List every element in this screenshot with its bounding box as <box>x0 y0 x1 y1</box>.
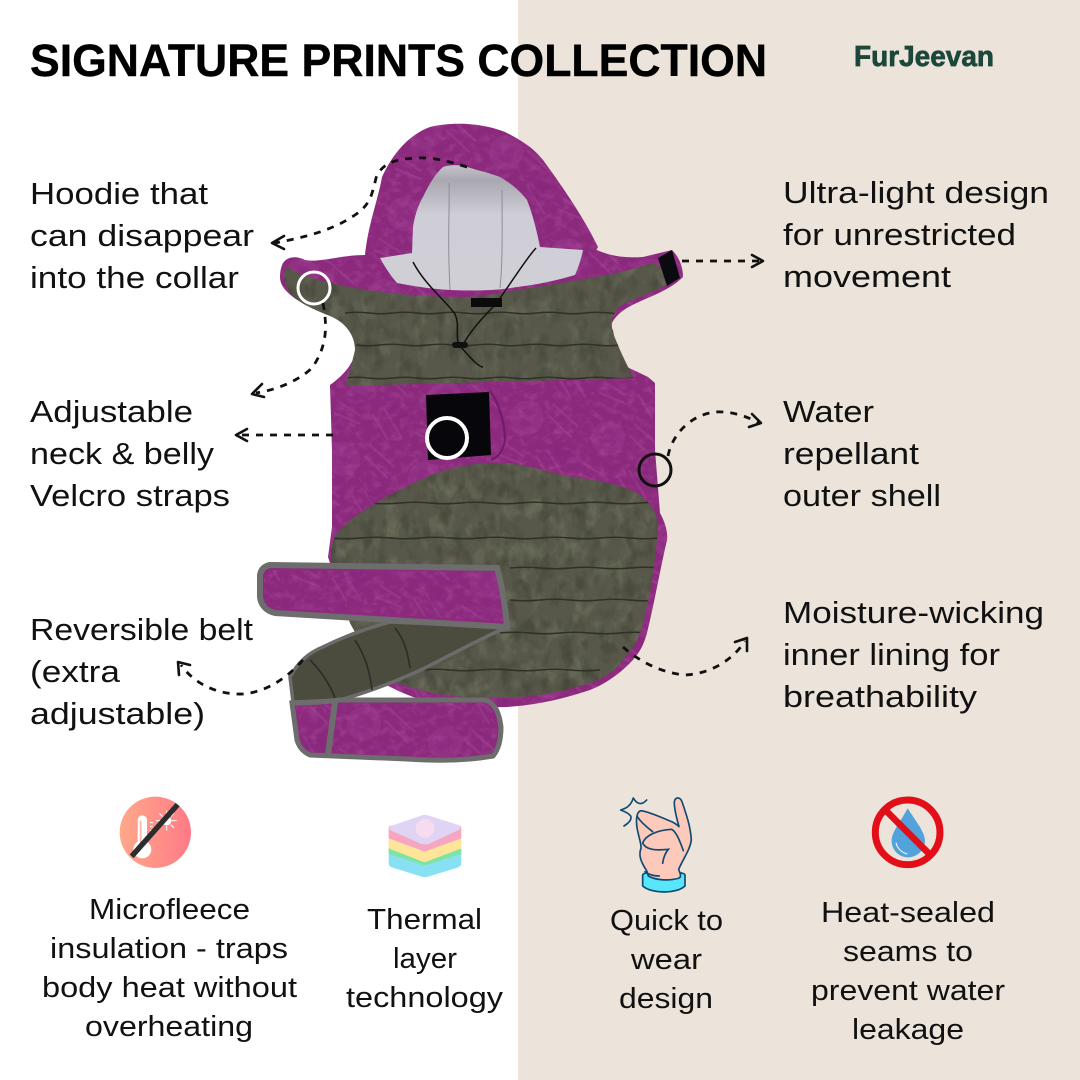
label: water repellant <box>783 394 941 513</box>
label: ultra-light: Ultra-light design <box>783 175 1049 210</box>
label: hoodie <box>30 176 254 295</box>
icon: no water drop <box>875 800 940 865</box>
panel: beige right background <box>518 0 1080 1080</box>
text: quick to wear design: design <box>619 983 713 1015</box>
velcro black patch <box>426 392 491 460</box>
label: hoodie: Hoodie that <box>30 176 208 211</box>
label: moisture-wicking <box>783 595 1044 714</box>
hood lining folds <box>449 183 502 290</box>
belt lower print <box>296 703 498 757</box>
label: ultra-light <box>783 175 1049 294</box>
arrow: water repellant <box>668 412 761 456</box>
text: microfleece insulation: body heat without <box>42 972 297 1004</box>
text: heat-sealed seams: Heat-sealed <box>821 897 995 929</box>
olive shadows lower <box>331 463 658 698</box>
arrow: ultra-light <box>682 255 763 267</box>
text: heat-sealed seams: prevent water <box>811 975 1005 1007</box>
label: water repellant: outer shell <box>783 478 941 513</box>
belt lower section <box>292 700 501 760</box>
inner olive lower panel <box>331 462 658 698</box>
text: quick to wear design: wear <box>630 944 702 976</box>
label: moisture-wicking: breathability <box>783 679 978 714</box>
logo: FurJeevan: FurJeevan <box>854 41 994 73</box>
callout ring: velcro <box>427 418 467 458</box>
icon: crossed thermometer <box>120 797 191 868</box>
hand creases <box>637 817 683 876</box>
label: hoodie: into the collar <box>30 260 239 295</box>
label: reversible belt <box>30 612 253 731</box>
belt underside folds <box>310 628 410 698</box>
inner olive neck panel <box>284 263 666 386</box>
belt loop <box>328 702 335 755</box>
text: microfleece insulation: insulation - traps <box>50 933 288 965</box>
olive highlights upper <box>304 268 666 386</box>
chest flap edge <box>490 391 505 460</box>
label: velcro straps: Adjustable <box>30 394 193 429</box>
olive shadows upper <box>284 264 662 385</box>
label: water repellant: Water <box>783 394 874 429</box>
belt underside olive <box>290 622 507 702</box>
belt upper section <box>260 565 507 627</box>
text: thermal layer technology: layer <box>393 943 457 975</box>
callout ring: outer shell <box>639 454 671 486</box>
label: ultra-light: for unrestricted <box>783 217 1016 252</box>
stitch lines upper <box>345 312 633 379</box>
text: microfleece insulation <box>42 894 297 1043</box>
olive highlights lower <box>336 463 654 698</box>
label: reversible belt: (extra <box>30 654 121 689</box>
text: microfleece insulation: Microfleece <box>89 894 250 926</box>
title: SIGNATURE PRINTS COLLECTION <box>30 35 767 86</box>
product photo: reversible dog jacket <box>260 124 690 760</box>
label: ultra-light: movement <box>783 259 951 294</box>
text: heat-sealed seams: leakage <box>852 1014 964 1046</box>
olive base upper <box>284 263 666 386</box>
label: hoodie: can disappear <box>30 218 254 253</box>
label: water repellant: repellant <box>783 436 919 471</box>
belt upper print <box>264 570 503 621</box>
arrow: moisture-wicking <box>623 638 747 675</box>
arrow: hoodie <box>272 158 467 249</box>
neck label <box>471 298 502 307</box>
label: velcro straps: Velcro straps <box>30 478 230 513</box>
hood inner lining <box>380 165 583 291</box>
jacket hood outer <box>365 124 598 280</box>
text: quick to wear design: Quick to <box>610 905 723 937</box>
label: velcro straps <box>30 394 230 513</box>
callout ring: collar <box>298 272 330 304</box>
olive base lower <box>331 462 658 698</box>
icon: thermal layers <box>389 815 461 877</box>
text: quick to wear design <box>610 905 723 1015</box>
text: heat-sealed seams <box>811 897 1005 1046</box>
text: thermal layer technology: technology <box>346 982 504 1014</box>
text: thermal layer technology: Thermal <box>367 904 482 936</box>
text: microfleece insulation: overheating <box>85 1011 253 1043</box>
text: heat-sealed seams: seams to <box>843 936 973 968</box>
text: thermal layer technology <box>346 904 504 1014</box>
icon: finger snap hand <box>621 798 691 892</box>
label: moisture-wicking: Moisture-wicking <box>783 595 1044 630</box>
hand <box>637 798 691 880</box>
arrow: reversible belt <box>178 660 303 694</box>
drawstring cord <box>413 248 536 367</box>
cuff <box>643 872 685 892</box>
velcro tab right <box>658 250 680 286</box>
label: moisture-wicking: inner lining for <box>783 637 1000 672</box>
jacket body outer <box>280 250 683 707</box>
label: velcro straps: neck & belly <box>30 436 215 471</box>
label: reversible belt: adjustable) <box>30 696 205 731</box>
label: reversible belt: Reversible belt <box>30 612 253 647</box>
cord toggle <box>452 342 468 348</box>
stitch lines lower <box>330 502 670 671</box>
arrow: neck strap <box>252 303 326 397</box>
snap spark <box>621 798 647 826</box>
arrow: belly strap <box>236 429 333 441</box>
